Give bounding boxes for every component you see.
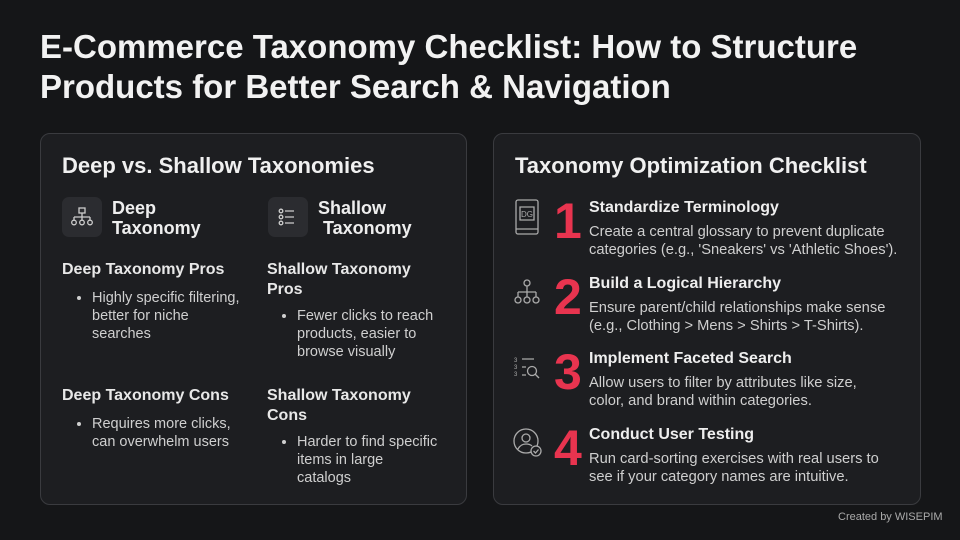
shallow pros: Shallow Taxonomy bbox=[267, 261, 411, 278]
icon: glossary book: DG bbox=[521, 210, 533, 219]
icon: faceted search bbox=[514, 358, 540, 378]
deep pros: Deep Taxonomy Pros bbox=[62, 261, 224, 278]
deep cons: Deep Taxonomy Cons bbox=[62, 387, 229, 404]
deep pros bbox=[62, 261, 239, 342]
icon: glossary book bbox=[515, 199, 539, 235]
item 2: Build a Logical Hierarchy bbox=[589, 275, 781, 292]
item 1: Create a central glossary to prevent duplicate bbox=[589, 224, 885, 240]
label: deep taxonomy: Taxonomy bbox=[112, 218, 201, 238]
item 2: (e.g., Clothing > Mens > Shirts > T-Shirts). bbox=[589, 318, 863, 334]
item 1: 1 bbox=[554, 193, 582, 249]
shallow pros: Pros bbox=[267, 281, 303, 298]
icon: list bbox=[268, 197, 308, 237]
icon: hierarchy bbox=[514, 279, 540, 304]
item 2 bbox=[514, 269, 885, 334]
panel: checklist bbox=[493, 133, 921, 505]
panel: deep vs shallow bbox=[40, 133, 467, 505]
icon: faceted search: 3 bbox=[514, 365, 518, 371]
shallow cons bbox=[267, 387, 437, 486]
shallow cons: Cons bbox=[267, 407, 307, 424]
item 4: Conduct User Testing bbox=[589, 426, 754, 443]
deep cons bbox=[62, 387, 231, 450]
title: Products for Better Search & Navigation bbox=[40, 68, 671, 105]
title: E-Commerce Taxonomy Checklist: How to Structure bbox=[40, 28, 857, 65]
icon: hierarchy bbox=[62, 197, 102, 237]
label: shallow taxonomy bbox=[318, 198, 412, 238]
item 3 bbox=[514, 344, 857, 409]
item 4: Run card-sorting exercises with real users to bbox=[589, 451, 879, 467]
icon: faceted search: 3 bbox=[514, 358, 518, 364]
deep cons: can overwhelm users bbox=[92, 434, 229, 450]
item 3: Allow users to filter by attributes like size, bbox=[589, 375, 857, 391]
item 2: 2 bbox=[554, 269, 582, 325]
panel heading: Deep vs. Shallow Taxonomies bbox=[62, 153, 375, 178]
shallow pros bbox=[267, 261, 433, 360]
item 4: see if your category names are intuitive. bbox=[589, 469, 849, 485]
label: shallow taxonomy: Shallow bbox=[318, 198, 386, 218]
item 4 bbox=[513, 420, 879, 485]
shallow cons: items in large bbox=[297, 452, 383, 468]
title bbox=[40, 28, 857, 105]
label: shallow taxonomy: Taxonomy bbox=[323, 218, 412, 238]
icon: user check bbox=[513, 428, 542, 457]
item 2: Ensure parent/child relationships make sense bbox=[589, 300, 885, 316]
footer credit: Created by WISEPIM bbox=[838, 511, 943, 523]
item 4: 4 bbox=[554, 420, 582, 476]
item 3: Implement Faceted Search bbox=[589, 350, 792, 367]
item 1 bbox=[515, 193, 897, 258]
deep pros: searches bbox=[92, 326, 151, 342]
shallow pros: browse visually bbox=[297, 344, 395, 360]
item 1: Standardize Terminology bbox=[589, 199, 779, 216]
panel heading: Taxonomy Optimization Checklist bbox=[515, 153, 867, 178]
item 3: 3 bbox=[554, 344, 582, 400]
deep pros: Highly specific filtering, bbox=[92, 290, 239, 306]
deep cons: Requires more clicks, bbox=[92, 416, 231, 432]
item 1: categories (e.g., 'Sneakers' vs 'Athletic Shoes'). bbox=[589, 242, 897, 258]
shallow cons: Shallow Taxonomy bbox=[267, 387, 411, 404]
label: deep taxonomy bbox=[112, 198, 201, 238]
icon: faceted search: 3 bbox=[514, 372, 518, 378]
shallow pros: products, easier to bbox=[297, 326, 416, 342]
shallow cons: catalogs bbox=[297, 470, 351, 486]
deep pros: better for niche bbox=[92, 308, 189, 324]
shallow pros: Fewer clicks to reach bbox=[297, 308, 433, 324]
shallow cons: Harder to find specific bbox=[297, 434, 437, 450]
item 3: color, and brand within categories. bbox=[589, 393, 812, 409]
label: deep taxonomy: Deep bbox=[112, 198, 156, 218]
